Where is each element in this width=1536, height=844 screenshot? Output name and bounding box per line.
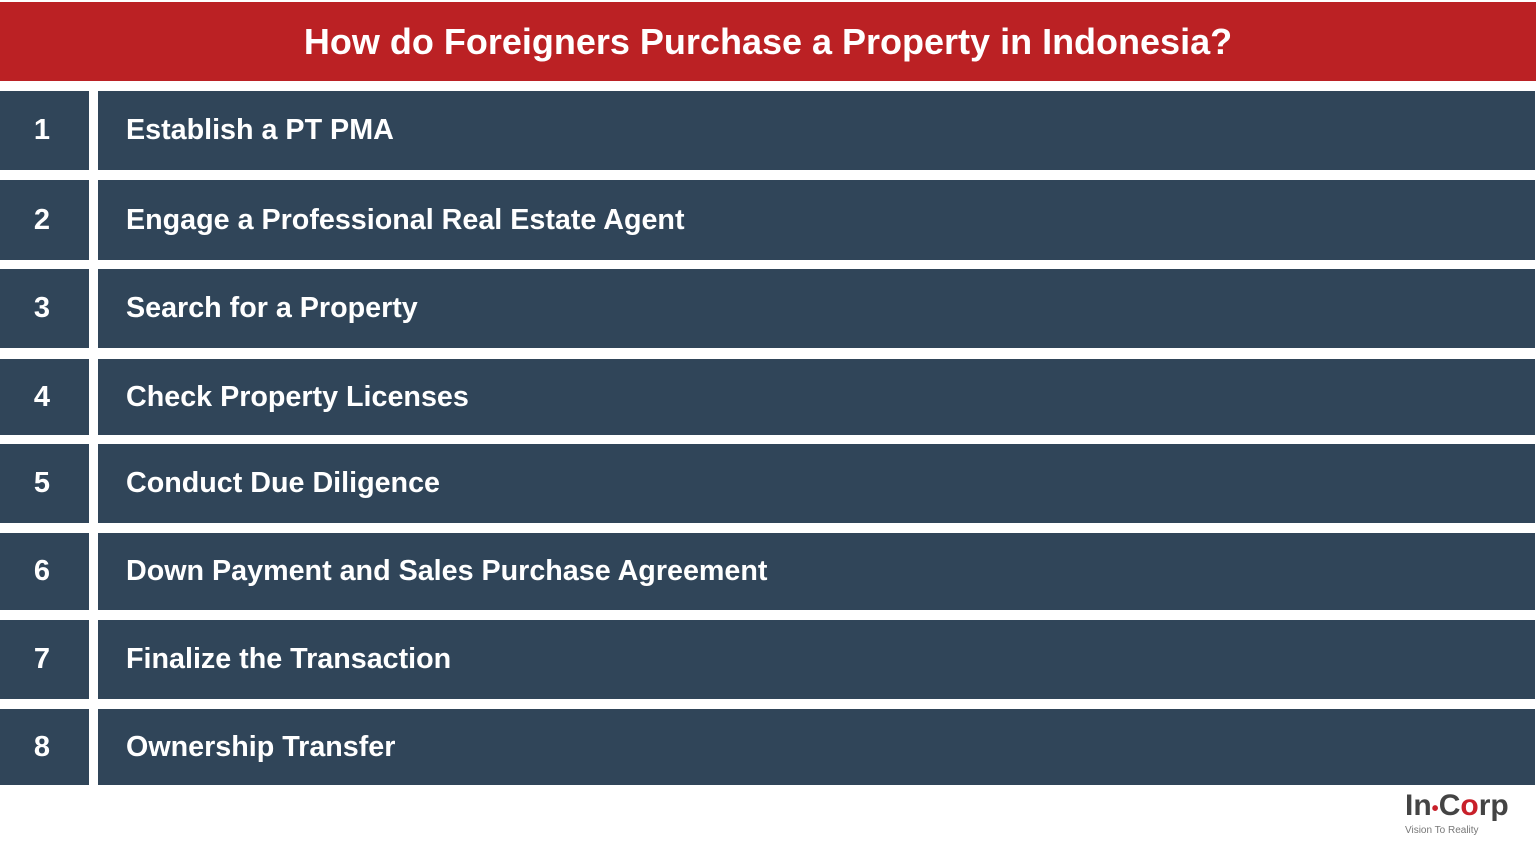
logo: Vision To Reality — [1405, 825, 1479, 836]
step 1 — [0, 91, 1535, 170]
step 5 — [0, 444, 1535, 523]
step 6: Down Payment and Sales Purchase Agreement — [126, 555, 767, 587]
step 2: 2 — [34, 204, 50, 236]
title: How do Foreigners Purchase a Property in Indonesia? — [304, 21, 1232, 62]
step 4: Check Property Licenses — [126, 380, 469, 412]
step 6 — [0, 533, 1535, 610]
step 3: 3 — [34, 292, 50, 324]
step 4: 4 — [34, 380, 50, 412]
step 5: Conduct Due Diligence — [126, 467, 440, 499]
step 2 — [0, 180, 1535, 260]
step 1: Establish a PT PMA — [126, 114, 394, 146]
step 8: 8 — [34, 730, 50, 762]
step 3 — [0, 269, 1535, 348]
title — [0, 2, 1536, 81]
step 8 — [0, 709, 1535, 785]
step 7 — [0, 620, 1535, 699]
step 3: Search for a Property — [126, 292, 418, 324]
logo: In•Corp — [1405, 789, 1509, 822]
step 4 — [0, 359, 1535, 435]
step 5: 5 — [34, 467, 50, 499]
step 6: 6 — [34, 555, 50, 587]
step 7: Finalize the Transaction — [126, 643, 451, 675]
step 8: Ownership Transfer — [126, 730, 395, 762]
step 7: 7 — [34, 643, 50, 675]
step 1: 1 — [34, 114, 50, 146]
step 2: Engage a Professional Real Estate Agent — [126, 204, 685, 236]
